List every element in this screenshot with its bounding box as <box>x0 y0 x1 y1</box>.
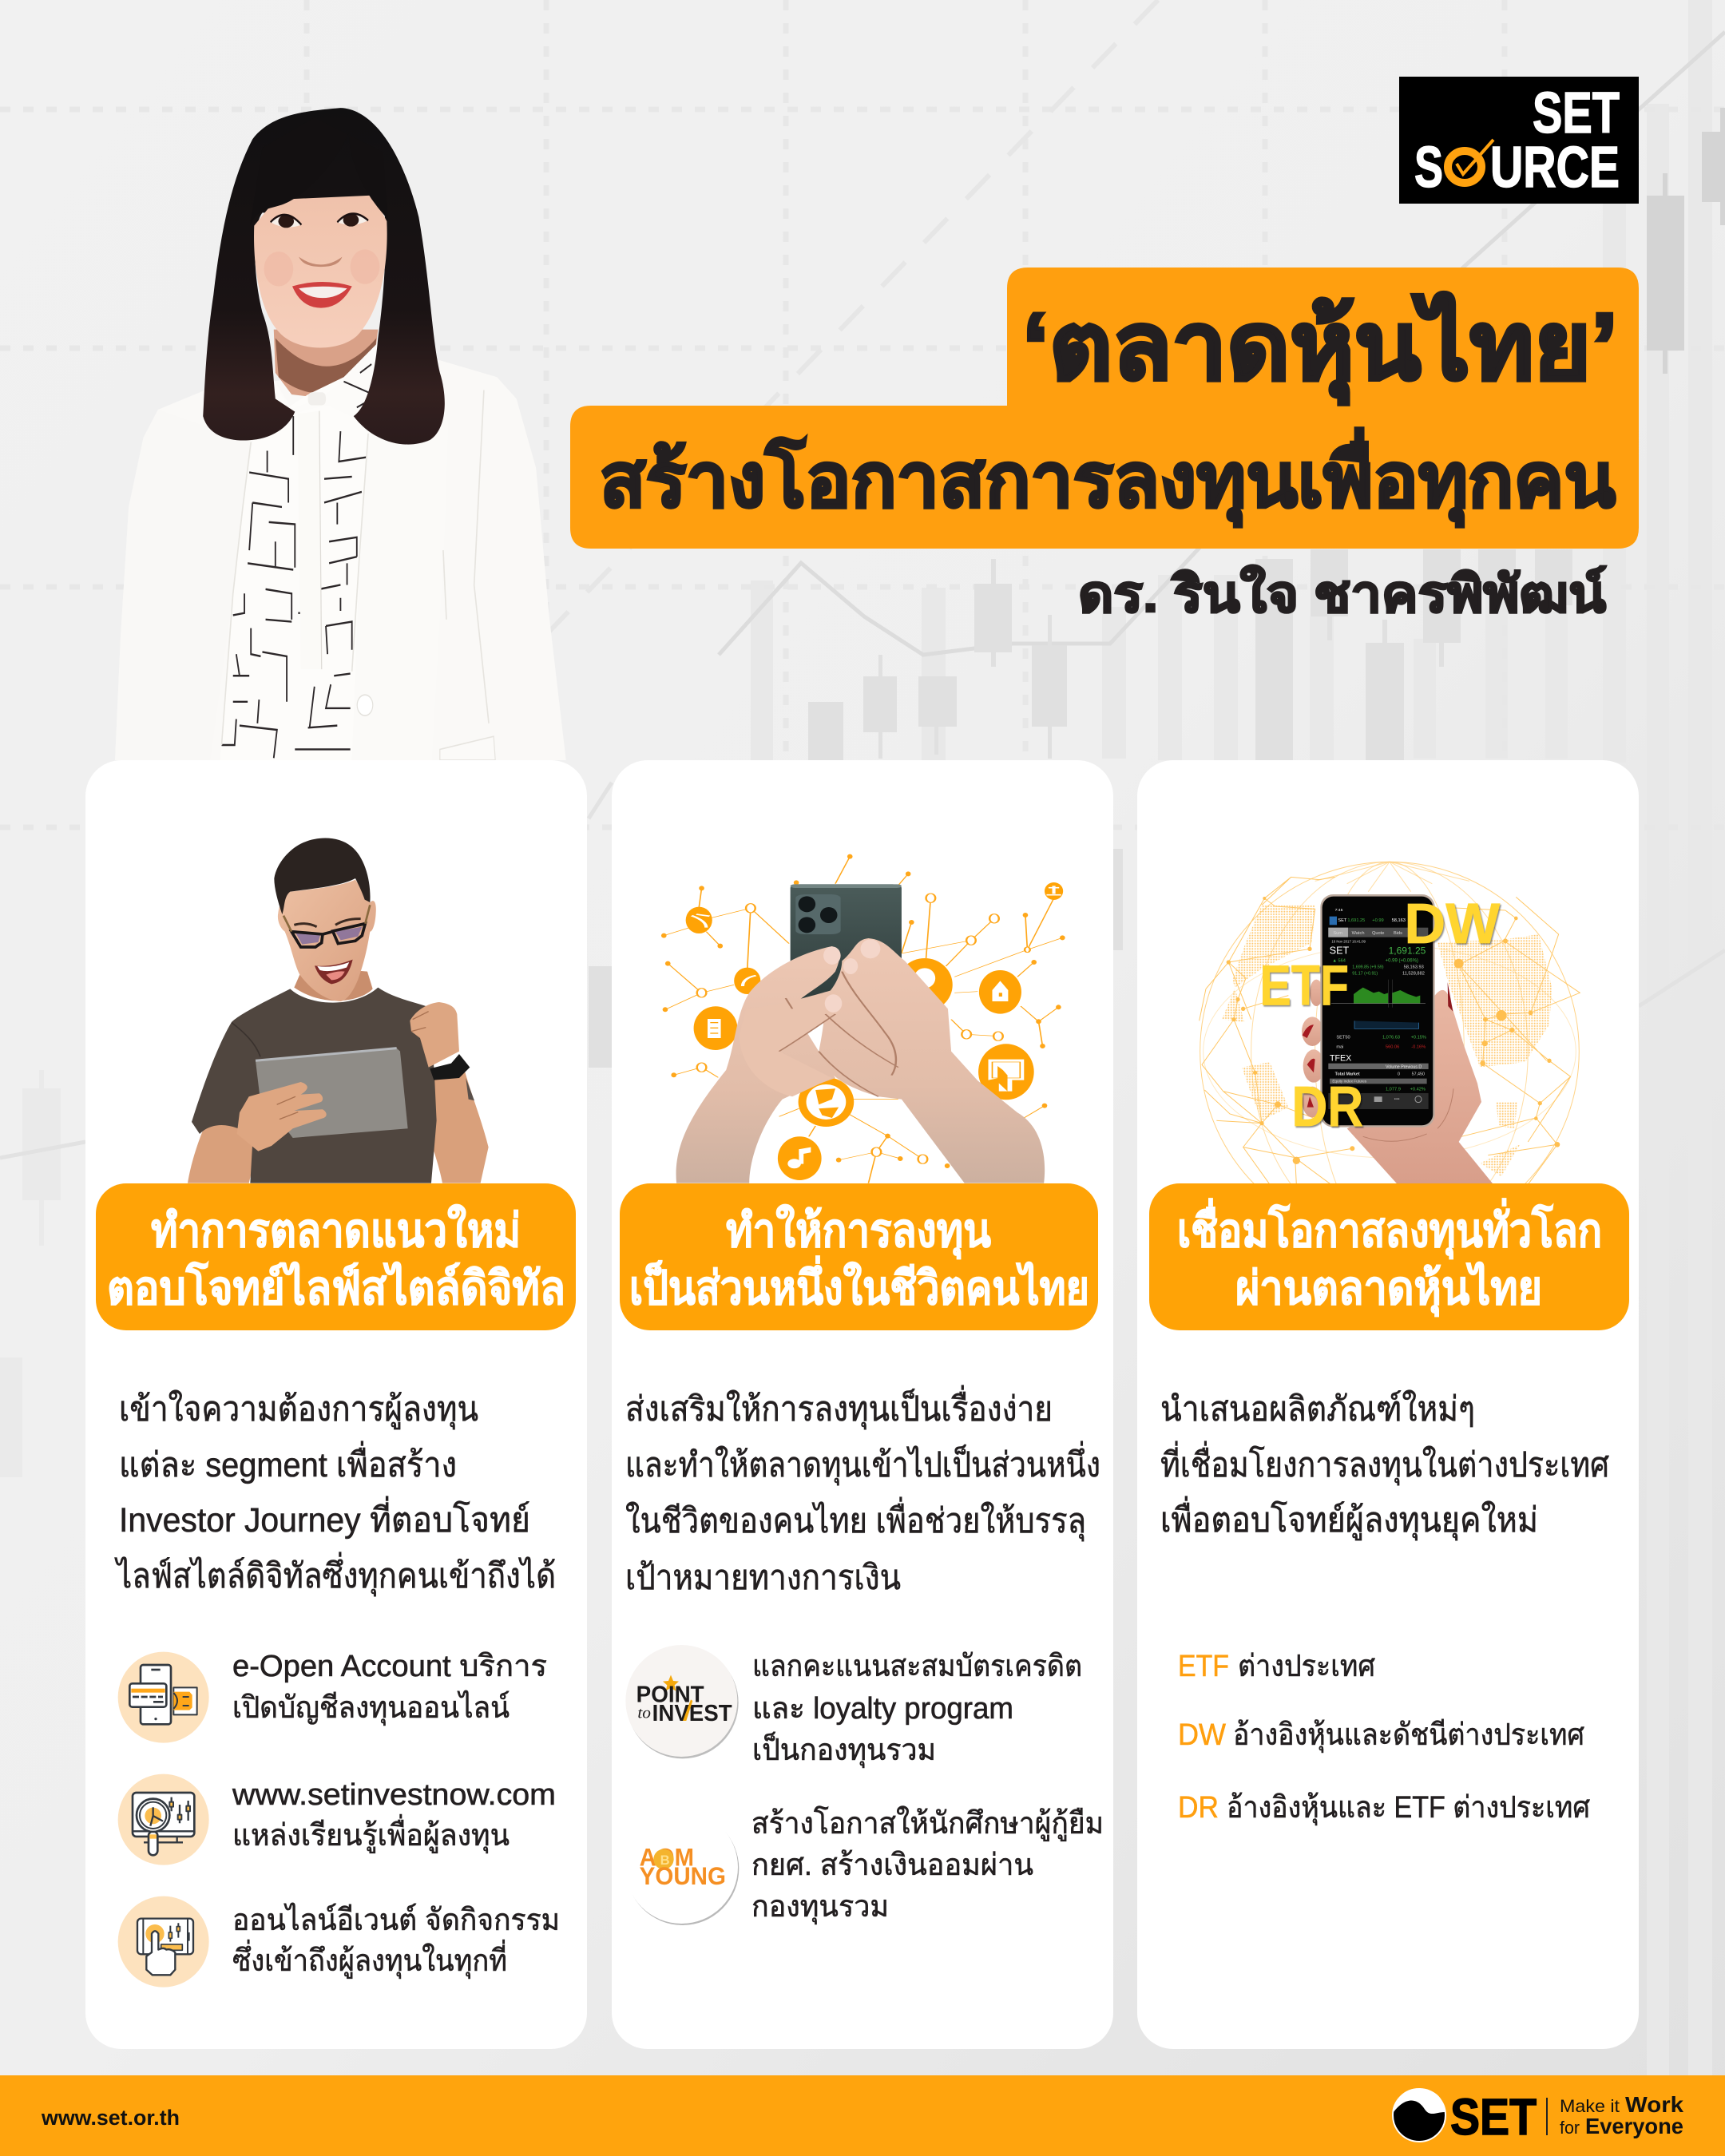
body text: marketing: ไลฟ์สไตล์ดิจิทัลซึ่งทุกคนเข้าถึงได้ <box>114 1552 556 1597</box>
body text: global <box>1160 1389 1609 1541</box>
icon: tablet with touch <box>118 1896 209 1988</box>
text: Point to Invest <box>752 1650 1082 1768</box>
illustration: globe, phone and product labels: Watch <box>1352 931 1364 936</box>
icon: mobile account opening <box>118 1652 209 1743</box>
illustration: globe, phone and product labels: 1,691.25 <box>1389 945 1426 957</box>
footer bar <box>0 2075 1725 2156</box>
card: investment part of life <box>612 760 1113 2049</box>
product list: ETF, DW, DR: อ้างอิงหุ้นและดัชนีต่างประเทศ <box>1233 1718 1584 1753</box>
title banner <box>570 268 1639 549</box>
body text: investing <box>625 1385 1100 1597</box>
text: Aom Young <box>751 1805 1104 1924</box>
body text: investing: เป้าหมายทางการเงิน <box>625 1559 901 1597</box>
body text: marketing <box>114 1389 556 1597</box>
logo: Aom Young <box>625 1811 739 1925</box>
illustration: globe, phone and product labels: 1,077.9 <box>1386 1087 1401 1092</box>
text: online events: ซึ่งเข้าถึงผู้ลงทุนในทุกที่ <box>232 1940 507 1979</box>
text: website <box>232 1778 556 1853</box>
heading: marketing <box>96 1183 576 1330</box>
text: online events <box>232 1903 560 1979</box>
footer bar: www.set.or.th <box>41 2106 180 2130</box>
photo: woman in white blazer <box>115 108 566 760</box>
text: e-Open Account: เปิดบัญชีลงทุนออนไลน์ <box>232 1690 510 1726</box>
illustration: excited man with tablet <box>188 838 489 1183</box>
text: Point to Invest: แลกคะแนนสะสมบัตรเครดิต <box>752 1650 1082 1683</box>
logo: SET Source <box>1399 77 1639 204</box>
illustration: globe, phone and product labels: 560.06 <box>1386 1045 1399 1050</box>
card: marketing <box>85 760 587 2049</box>
text: online events: ออนไลน์อีเวนต์ จัดกิจกรรม <box>232 1903 560 1937</box>
illustration: globe, phone and product labels: Sum <box>1333 931 1342 936</box>
illustration: globe, phone and product labels: 91.17 (+0.91) <box>1352 972 1378 977</box>
logo: Point to Invest: INVEST <box>652 1701 732 1726</box>
illustration: globe, phone and product labels: 1,699.85 (+9.59) <box>1352 965 1384 970</box>
text: Point to Invest: และ loyalty program <box>752 1692 1013 1726</box>
logo: Aom Young: AOM <box>640 1844 694 1872</box>
heading: global: เชื่อมโอกาสลงทุนทั่วโลก <box>1177 1198 1602 1260</box>
body text: global: เพื่อตอบโจทย์ผู้ลงทุนยุคใหม่ <box>1160 1496 1538 1541</box>
product list: ETF, DW, DR <box>1178 1650 1590 1825</box>
footer bar: Make it <box>1560 2096 1620 2116</box>
text: Aom Young: กองทุนรวม <box>751 1890 889 1924</box>
body text: marketing: เข้าใจความต้องการผู้ลงทุน <box>119 1389 478 1430</box>
illustration: globe, phone and product labels: SET <box>1338 918 1347 923</box>
title banner: สร้างโอกาสการลงทุนเพื่อทุกคน <box>600 427 1616 527</box>
product list: ETF, DW, DR: ต่างประเทศ <box>1238 1650 1375 1683</box>
card: global opportunity <box>1137 760 1639 2049</box>
illustration: globe, phone and product labels: +0.42% <box>1410 1087 1426 1092</box>
illustration: globe, phone and product labels: 7:45 <box>1335 908 1343 913</box>
logo: SET Source: URCE <box>1490 136 1620 200</box>
text: Point to Invest: เป็นกองทุนรวม <box>752 1731 936 1768</box>
logo: SET Source: SET <box>1533 81 1620 145</box>
illustration: globe, phone and product labels: +0.99 (+0.06%) <box>1386 959 1418 964</box>
body text: marketing: แต่ละ segment เพื่อสร้าง <box>119 1441 457 1484</box>
illustration: globe, phone and product labels: +0.99 <box>1372 918 1384 923</box>
illustration: globe, phone and product labels: TFEX <box>1330 1054 1351 1064</box>
illustration: globe, phone and product labels: 58,163.93 <box>1404 965 1424 970</box>
product list: ETF, DW, DR: DR <box>1178 1791 1219 1825</box>
logo: Point to Invest <box>625 1645 739 1758</box>
text: Aom Young: สร้างโอกาสให้นักศึกษาผู้กู้ยืม <box>751 1805 1104 1841</box>
illustration: globe, phone and product labels: ▲ 564 <box>1332 959 1346 964</box>
illustration: globe, phone and product labels: 58,163 <box>1392 918 1406 923</box>
illustration: globe, phone and product labels: 1,691.25 <box>1347 918 1365 923</box>
illustration: globe, phone and product labels: SET50 <box>1336 1036 1350 1040</box>
heading: global: ผ่านตลาดหุ้นไทย <box>1235 1262 1542 1318</box>
body text: global: นำเสนอผลิตภัณฑ์ใหม่ๆ <box>1160 1389 1475 1429</box>
text: website: แหล่งเรียนรู้เพื่อผู้ลงทุน <box>232 1814 510 1853</box>
illustration: globe, phone and product labels: +0.15% <box>1411 1036 1426 1040</box>
title banner: ‘ตลาดหุ้นไทย’ <box>1022 292 1618 405</box>
logo: Point to Invest: to <box>637 1705 651 1722</box>
logo: Aom Young: YOUNG <box>640 1862 726 1890</box>
heading: marketing: ทำการตลาดแนวใหม่ <box>151 1203 521 1257</box>
heading: investing: ทำให้การลงทุน <box>726 1203 991 1260</box>
illustration: globe, phone and product labels: 11,528,882 <box>1402 972 1425 977</box>
heading: investing: เป็นส่วนหนึ่งในชีวิตคนไทย <box>629 1255 1089 1314</box>
illustration: globe, phone and product labels: DW <box>1404 892 1501 956</box>
body text: investing: และทำให้ตลาดทุนเข้าไปเป็นส่วนหนึ่ง <box>625 1441 1100 1486</box>
footer bar: Everyone <box>1585 2114 1683 2138</box>
logo: Point to Invest: POINT <box>636 1682 704 1708</box>
text: Aom Young: กยศ. สร้างเงินออมผ่าน <box>751 1849 1033 1882</box>
illustration: globe, phone and product labels: Bids <box>1394 931 1402 936</box>
heading: marketing: ตอบโจทย์ไลฟ์สไตล์ดิจิทัล <box>107 1260 565 1314</box>
illustration: globe, phone and product labels: mai <box>1336 1045 1343 1050</box>
product list: ETF, DW, DR: ETF <box>1178 1650 1229 1683</box>
logo: Aom Young: B <box>660 1853 670 1868</box>
illustration: globe, phone and product labels: DR <box>1291 1075 1363 1139</box>
body text: investing: ในชีวิตของคนไทย เพื่อช่วยให้บรรลุ <box>625 1497 1086 1542</box>
footer bar: Work <box>1625 2092 1683 2117</box>
illustration: globe, phone and product labels: Total Market <box>1335 1072 1360 1077</box>
product list: ETF, DW, DR: DW <box>1178 1718 1226 1752</box>
product list: ETF, DW, DR: อ้างอิงหุ้นและ ETF ต่างประเทศ <box>1227 1791 1590 1825</box>
illustration: globe, phone and product labels: Equity Index Futures <box>1332 1080 1367 1084</box>
illustration: globe, phone and product labels: Volume Previous D <box>1386 1064 1422 1069</box>
footer bar: SET <box>1450 2088 1537 2146</box>
icon: monitor with magnifier <box>118 1774 209 1865</box>
logo: SET Source: S <box>1414 136 1443 200</box>
illustration: globe, phone and product labels: ••• <box>1394 1096 1400 1102</box>
footer bar: for <box>1560 2118 1580 2138</box>
illustration: globe, phone and product labels: 1,076.63 <box>1382 1036 1400 1040</box>
text: e-Open Account <box>232 1650 547 1726</box>
illustration: globe, phone and product labels: 57,450 <box>1412 1072 1425 1077</box>
illustration: hands holding phone with orange network <box>661 854 1065 1183</box>
illustration: globe, phone and product labels <box>1200 862 1580 1241</box>
author name: ดร. รินใจ ชาครพิพัฒน์ <box>1078 565 1607 623</box>
illustration: globe, phone and product labels: 0 <box>1398 1072 1400 1077</box>
body text: global: ที่เชื่อมโยงการลงทุนในต่างประเทศ <box>1160 1441 1609 1486</box>
illustration: globe, phone and product labels: SET <box>1330 945 1350 957</box>
heading: investing <box>620 1183 1098 1330</box>
heading: global <box>1149 1183 1629 1330</box>
illustration: globe, phone and product labels: -0.16% <box>1411 1045 1426 1050</box>
illustration: globe, phone and product labels: ETF <box>1259 953 1349 1017</box>
illustration: globe, phone and product labels: Quote <box>1372 931 1384 936</box>
text: e-Open Account: e-Open Account บริการ <box>232 1650 547 1683</box>
illustration: globe, phone and product labels: 16 Nov 2017 16:41:09 <box>1331 939 1366 943</box>
text: website: www.setinvestnow.com <box>232 1778 556 1812</box>
body text: investing: ส่งเสริมให้การลงทุนเป็นเรื่องง่าย <box>625 1385 1053 1430</box>
body text: marketing: Investor Journey ที่ตอบโจทย์ <box>119 1496 530 1540</box>
